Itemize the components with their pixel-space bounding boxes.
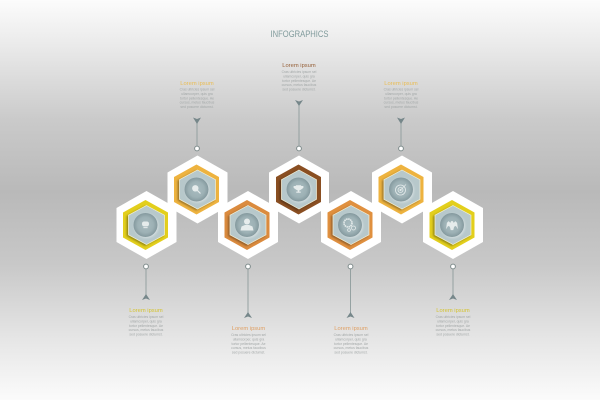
icon: gears [344,219,356,231]
text block: step 5: ullamcorper, quis gra [335,337,367,341]
connector: step 5 [346,264,354,318]
text block: step 2: Cras ultricies ipsum sel [180,88,215,92]
hexagon: step 1 yellow [116,191,176,259]
connector: step 3 [244,264,252,318]
text block: step 1 [129,308,164,337]
text block: step 5 [334,326,369,355]
text block: step 7: cursus, metus faucibus [436,328,471,332]
text block: step 1: tortor pellentesque. Ae [129,324,163,328]
text block: step 2: tortor pellentesque. Ae [180,96,214,100]
icon: person [240,218,254,230]
text block: step 4: Lorem ipsum [282,63,316,69]
text block: step 3: tortor pellentesque. Ae [232,342,266,346]
connector: step 1 [142,264,150,300]
text block: step 4 [282,63,317,92]
icon: magnifier [192,185,200,194]
text block: step 4: cursus, metus faucibus [282,83,317,87]
icon: trophy [294,185,303,193]
text block: step 7: ullamcorper, quis gra [437,319,469,323]
hexagon: step 7 yellow [423,191,483,259]
text block: step 1: ullamcorper, quis gra [130,319,162,323]
text block: step 5: Cras ultricies ipsum sel [334,333,369,337]
text block: step 2: ullamcorper, quis gra [181,92,213,96]
text block: step 6: Lorem ipsum [384,81,418,87]
hexagon: step 3 orange [218,191,278,259]
connector: step 4 [295,100,303,151]
text block: step 5: cursus, metus faucibus [334,346,369,350]
text block: step 2 [180,81,215,109]
text block: step 3 [231,326,266,355]
text block: step 2: cursus, metus faucibus [180,101,215,105]
text block: step 7 [436,308,471,337]
text block: step 4: sed posuere dictumst. [282,88,316,92]
text block: step 1: sed posuere dictumst. [129,333,163,337]
text block: step 4: tortor pellentesque. Ae [282,79,316,83]
connector: step 6 [397,118,405,151]
text block: step 7: Lorem ipsum [436,308,470,314]
hexagon: step 6 gold [372,156,432,224]
text block: step 5: sed posuere dictumst. [334,351,368,355]
text block: step 4: ullamcorper, quis gra [283,74,315,78]
text block: step 3: Lorem ipsum [232,326,265,332]
connector: step 7 [449,264,457,300]
text block: step 1: Lorem ipsum [129,308,163,314]
icon: group of people [446,221,458,230]
text block: step 3: sed posuere dictumst. [232,351,265,355]
text block: step 7: tortor pellentesque. Ae [436,324,470,328]
text block: step 6: Cras ultricies ipsum sel [384,88,419,92]
text block: step 4: Cras ultricies ipsum sel [282,70,317,74]
text block: step 6: cursus, metus faucibus [384,101,419,105]
hexagon: step 4 brown [269,156,329,224]
text block: step 5: tortor pellentesque. Ae [334,342,368,346]
text block: step 7: Cras ultricies ipsum sel [436,315,471,319]
title: INFOGRAPHICS [270,29,328,39]
hexagon: step 5 orange [321,191,381,259]
icon: target [396,184,406,195]
text block: step 6: ullamcorper, quis gra [385,92,417,96]
text block: step 7: sed posuere dictumst. [436,333,470,337]
text block: step 3: ullamcorper, quis gra [233,337,264,341]
text block: step 6 [384,81,419,109]
text block: step 2: sed posuere dictumst. [180,105,214,109]
text block: step 2: Lorem ipsum [180,81,214,87]
text block: step 1: Cras ultricies ipsum sel [129,315,164,319]
text block: step 3: Cras ultricies ipsum sel [231,333,266,337]
connector: step 2 [193,118,201,151]
text block: step 3: cursus, metus faucibus [231,346,266,350]
text block: step 5: Lorem ipsum [334,326,368,332]
icon: speech bubble [142,222,149,228]
text block: step 1: cursus, metus faucibus [129,328,164,332]
text block: step 6: sed posuere dictumst. [384,105,418,109]
text block: step 6: tortor pellentesque. Ae [384,96,418,100]
hexagon: step 2 gold [168,156,228,224]
